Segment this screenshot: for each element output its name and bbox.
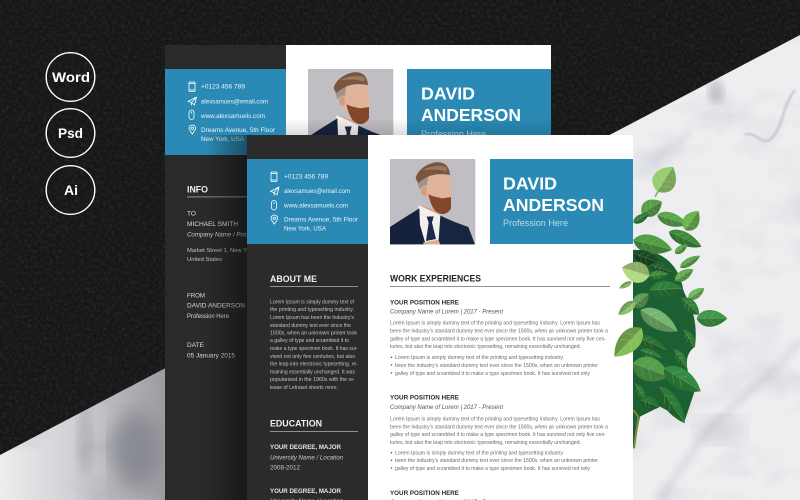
back resume sheet [165,45,551,500]
education section: University Name / Location [270,454,343,462]
back sheet name banner: Profession Here [421,129,486,139]
format badges [46,53,95,214]
front sheet contact details: alexsamues@email.com [284,188,350,195]
badge: Word [46,53,95,101]
back sheet contact icons [188,82,196,134]
job entry 2: galley of type and scrambled it to make a type specimen book. It has survived not only five cen- [390,432,606,438]
about me section: lease of Letraset sheets more. [270,385,338,391]
job entry 1 [390,299,608,377]
about me section: the printing and typesetting industry. [270,307,354,313]
front sheet contact details: www.alexsamuels.com [283,202,348,210]
back sheet white page [286,45,551,140]
back sheet info section: FROM [187,292,205,300]
job entry 1: turies, but also the leap into electronic typesetting, remaining essentially unchanged. [390,344,581,350]
back sheet contact details: Dreams Avenue, 5th Floor [201,127,276,134]
back sheet info section: DATE [187,342,205,349]
education section [270,418,358,500]
job entry 1: been the industry's standard dummy text ever since the 1500s, when an unknown printer took a [390,328,608,334]
about me section: standard dummy text ever since the [270,323,351,329]
back sheet name banner: DAVID [421,84,475,104]
job entry 1: galley of type and scrambled it to make a type specimen book. It has survived not only five cen- [390,336,606,342]
front sheet contact details: New York, USA [284,226,326,232]
work experiences heading: WORK EXPERIENCES [390,274,481,284]
job entry 1: Company Name of Lorem | 2017 - Present [390,308,504,316]
job entry 2: YOUR POSITION HERE [390,395,460,402]
job entry 2: been the industry's standard dummy text ever since the 1500s, when an unknown printer took a [390,424,608,430]
back sheet info section: Market Street 1, New Y [187,248,247,254]
job entry 3 [390,490,504,500]
about me section: the leap into electronic typesetting, re- [270,362,358,368]
front sheet contact details: +0123 456 789 [284,174,328,180]
badge: Ai [46,166,95,214]
front sheet contact band [247,159,368,244]
job entry 1: been the industry's standard dummy text ever since the 1500s, when an unknown printer [395,363,598,369]
back sheet info section: Profession Here [187,313,229,320]
job entry 2: Lorem Ipsum is simply dummy text of the printing and typesetting industry. Lorem Ipsum has [390,416,600,422]
back sheet contact details [200,84,276,143]
about me section: maining essentially unchanged. It was [270,370,355,376]
job entry 1: Lorem Ipsum is simply dummy text of the printing and typesetting industry. Lorem Ipsum has [390,320,600,326]
about me section: vived not only five centuries, but also [270,354,355,360]
about me section: popularised in the 1960s with the re- [270,377,355,383]
about me section: Lorem Ipsum has been the Industry's [270,315,354,321]
education section: EDUCATION [270,418,322,428]
back sheet info section: MICHAEL SMITH [187,221,238,228]
back sheet contact band [165,69,286,155]
back sheet info section: 05 January 2015 [187,352,235,360]
badge: Psd: Psd [58,126,83,141]
plant: rear leaves [629,161,727,448]
education section: YOUR DEGREE, MAJOR [270,444,341,451]
front resume sheet [247,135,633,500]
job entry 3: YOUR POSITION HERE [390,490,460,497]
about me section: 1500s, when an unknown printer took [270,330,357,336]
job entry 2: turies, but also the leap into electronic typesetting, remaining essentially unchanged. [390,440,581,446]
back sheet sidebar [165,45,286,500]
back sheet contact details: +0123 456 789 [201,84,245,90]
front sheet white page [368,135,633,500]
front sheet photo [390,159,475,244]
badge: Psd [46,109,95,157]
job entry 2: been the industry's standard dummy text ever since the 1500s, when an unknown printer [395,458,598,464]
back sheet contact details: www.alexsamuels.com [200,113,265,120]
job entry 2: Company Name of Lorem | 2017 - Present [390,404,504,411]
job entry 2: Lorem Ipsum is simply dummy text of the printing and typesetting industry. [395,450,564,456]
plant: front leaves overlapping the sheet [607,258,652,364]
front sheet contact details: Dreams Avenue, 5th Floor [284,216,359,224]
badge: Word: Word [52,70,90,85]
back sheet info section: United States [187,257,222,263]
front sheet name banner [490,159,633,244]
back sheet info section: Company Name / Pos [187,232,248,238]
about me section: a galley of type and scrambled it to [270,338,349,344]
front sheet contact icons [270,172,279,224]
front sheet sidebar [247,135,368,500]
shadow cast by front sheet [205,118,551,500]
job entry 2: galley of type and scrambled it to make a type specimen book. It has survived not only [395,466,590,472]
about me section [270,274,358,391]
back sheet info section: INFO [187,184,208,194]
back sheet contact details: alexsamues@email.com [201,98,268,106]
education section: 2008-2012 [270,464,300,472]
back sheet info section [187,184,248,360]
front sheet contact details [283,174,359,232]
job entry 1: galley of type and scrambled it to make a type specimen book. It has survived not only [395,371,590,377]
education section: YOUR DEGREE, MAJOR [270,488,341,495]
back sheet contact details: New York, USA [201,136,244,143]
job entry 1: YOUR POSITION HERE [390,299,460,306]
back sheet photo [308,69,393,154]
back sheet name banner: ANDERSON [421,105,521,125]
about me section: Lorem Ipsum is simply dummy text of [270,300,354,306]
job entry 1: Lorem Ipsum is simply dummy text of the printing and typesetting industry. [395,355,564,361]
job entry 2 [390,395,608,472]
back sheet name banner [407,69,551,139]
about me section: make a type specimen book. It has sur- [270,346,358,352]
about me section: ABOUT ME [270,274,317,284]
front sheet name banner: Profession Here [503,218,568,228]
badge: Ai: Ai [64,183,78,198]
back sheet info section: TO [187,210,196,218]
front sheet name banner: ANDERSON [503,195,604,215]
back sheet info section: DAVID ANDERSON [187,302,245,310]
front sheet name banner: DAVID [503,174,557,194]
